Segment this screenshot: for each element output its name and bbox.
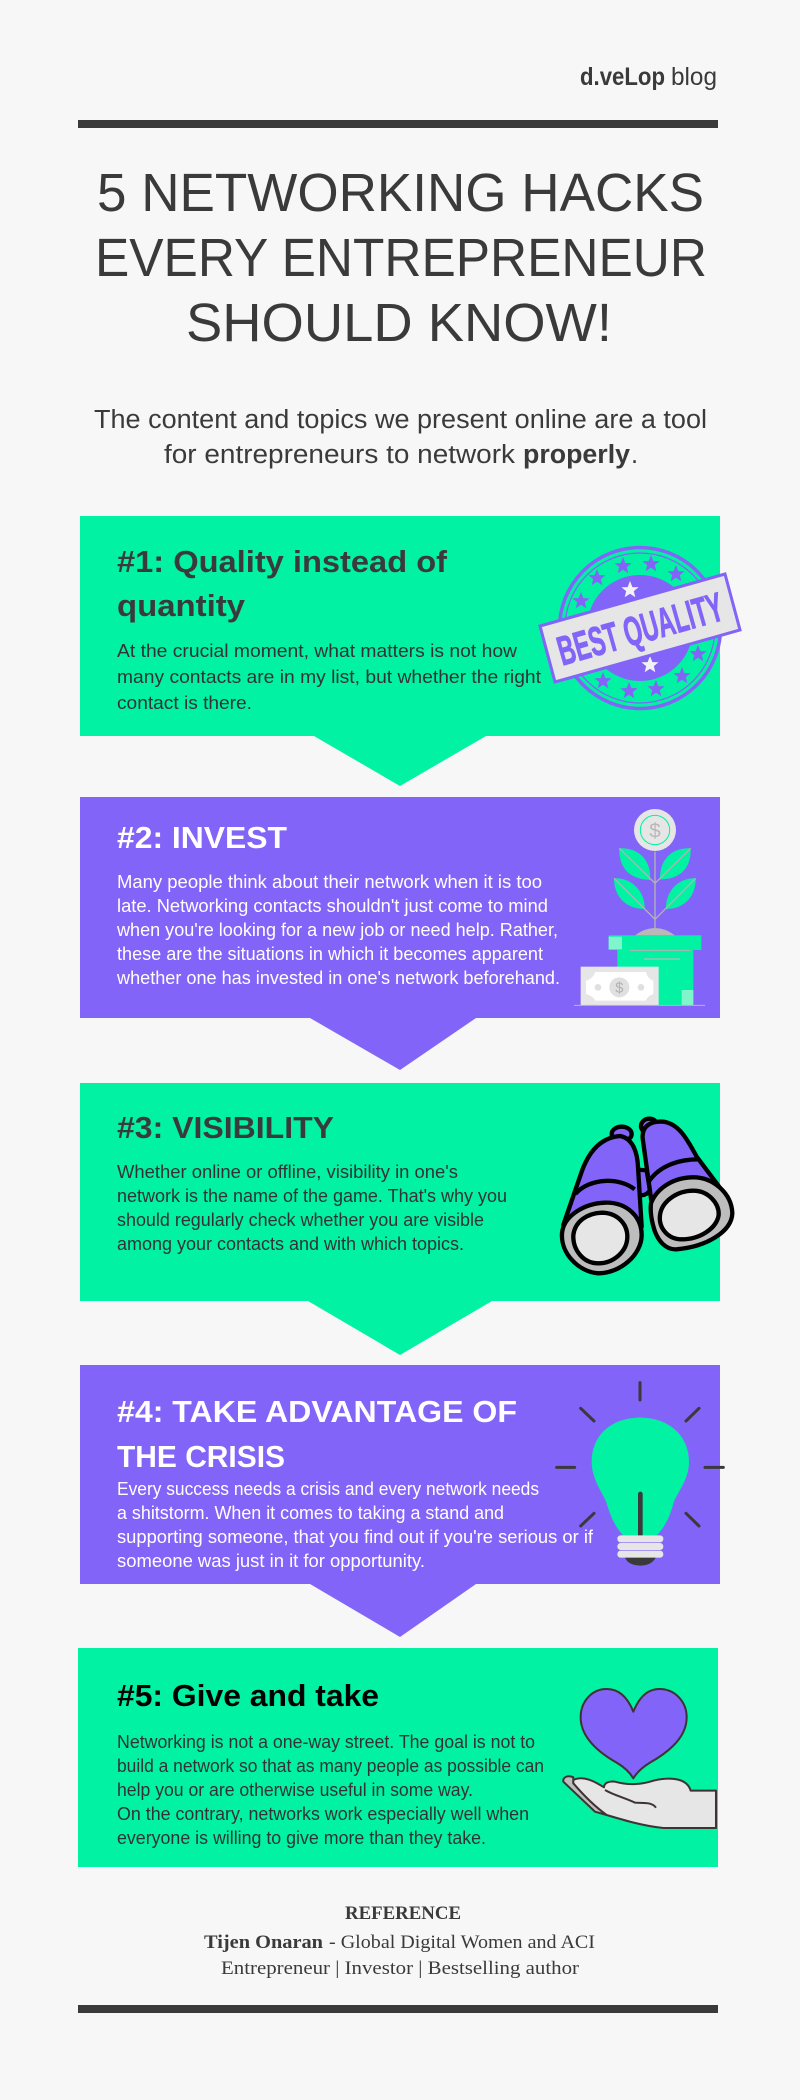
text: #1 body: many contacts are in my list, but whether the right (117, 667, 541, 687)
panel: #2 invest (80, 797, 720, 1070)
panel: #5 give and take (78, 1648, 718, 1867)
text: #2 body: Many people think about their network when it is too (117, 872, 542, 892)
text: #4 body: a shitstorm. When it comes to taking a stand and (117, 1503, 504, 1523)
title: SHOULD KNOW! (186, 293, 612, 353)
reference block: REFERENCE (345, 1903, 461, 1924)
logo: d.velop blog (580, 63, 717, 91)
heading: #1 (117, 544, 448, 623)
heading: #2: #2: INVEST (117, 820, 287, 855)
subtitle: The content and topics we present online are a tool (94, 406, 707, 434)
text: #3 body: network is the name of the game. That's why you (117, 1186, 507, 1206)
reference block (204, 1903, 595, 1979)
text: #3 body: Whether online or offline, visibility in one's (117, 1162, 458, 1182)
heading: #3: #3: VISIBILITY (117, 1110, 334, 1145)
title: 5 NETWORKING HACKS (97, 163, 704, 223)
text: #2 body (116, 872, 560, 988)
heading: #1: #1: Quality instead of (117, 544, 448, 579)
text: #5 body (117, 1732, 544, 1848)
text: #2 body: late. Networking contacts shouldn't just come to mind (117, 896, 548, 916)
reference block: Entrepreneur | Investor | Bestselling author (221, 1958, 580, 1979)
panel: #3 visibility (80, 1083, 732, 1355)
text: #3 body: should regularly check whether you are visible (117, 1210, 484, 1230)
reference block: - Global Digital Women and ACI (329, 1932, 595, 1953)
reference block: Tijen Onaran (204, 1932, 323, 1953)
heading: #4: #4: TAKE ADVANTAGE OF (117, 1394, 517, 1429)
logo: d.velop blog: blog (671, 63, 717, 91)
heading: #5: #5: Give and take (117, 1678, 379, 1713)
text: #2 body: whether one has invested in one's network beforehand. (116, 968, 560, 988)
icon: heart over open hand (563, 1689, 716, 1828)
subtitle: . (631, 441, 638, 469)
text: #4 body: Every success needs a crisis and every network needs (117, 1479, 539, 1499)
title: EVERY ENTREPRENEUR (95, 228, 707, 288)
subtitle: for entrepreneurs to network (164, 441, 515, 469)
heading: #4 (117, 1394, 517, 1474)
icon: money plant in pot: $ (615, 981, 623, 997)
text: #5 body: everyone is willing to give more than they take. (117, 1828, 486, 1848)
text: #1 body (117, 641, 541, 713)
text: #1 body: At the crucial moment, what matters is not how (117, 641, 518, 661)
text: #3 body (117, 1162, 507, 1254)
text: #2 body: when you're looking for a new job or need help. Rather, (116, 920, 558, 940)
text: #2 body: these are the situations in which it becomes apparent (117, 944, 543, 964)
panel: #4 take advantage of the crisis (80, 1365, 723, 1637)
subtitle: properly (523, 441, 631, 469)
text: #4 body (117, 1479, 594, 1571)
title (95, 163, 707, 353)
icon: binoculars (562, 1119, 732, 1273)
heading: #1: quantity (117, 588, 246, 623)
icon: money plant in pot (574, 809, 705, 1005)
text: #4 body: supporting someone, that you find out if you're serious or if (117, 1527, 594, 1547)
text: #5 body: Networking is not a one-way street. The goal is not to (117, 1732, 535, 1752)
icon: light bulb (557, 1383, 723, 1566)
heading: #4: THE CRISIS (117, 1439, 285, 1474)
subtitle (94, 406, 707, 469)
logo: d.velop blog: d.veLop (580, 63, 665, 91)
text: #4 body: someone was just in it for opportunity. (117, 1551, 425, 1571)
text: #5 body: build a network so that as many people as possible can (117, 1756, 544, 1776)
icon: money plant in pot: $ (649, 820, 661, 843)
panel: #1 quality instead of quantity (80, 516, 740, 786)
text: #5 body: On the contrary, networks work especially well when (117, 1804, 529, 1824)
text: #3 body: among your contacts and with which topics. (117, 1234, 464, 1254)
text: #1 body: contact is there. (117, 693, 252, 713)
text: #5 body: help you or are otherwise useful in some way. (117, 1780, 473, 1800)
icon: best quality stamp (540, 548, 740, 708)
